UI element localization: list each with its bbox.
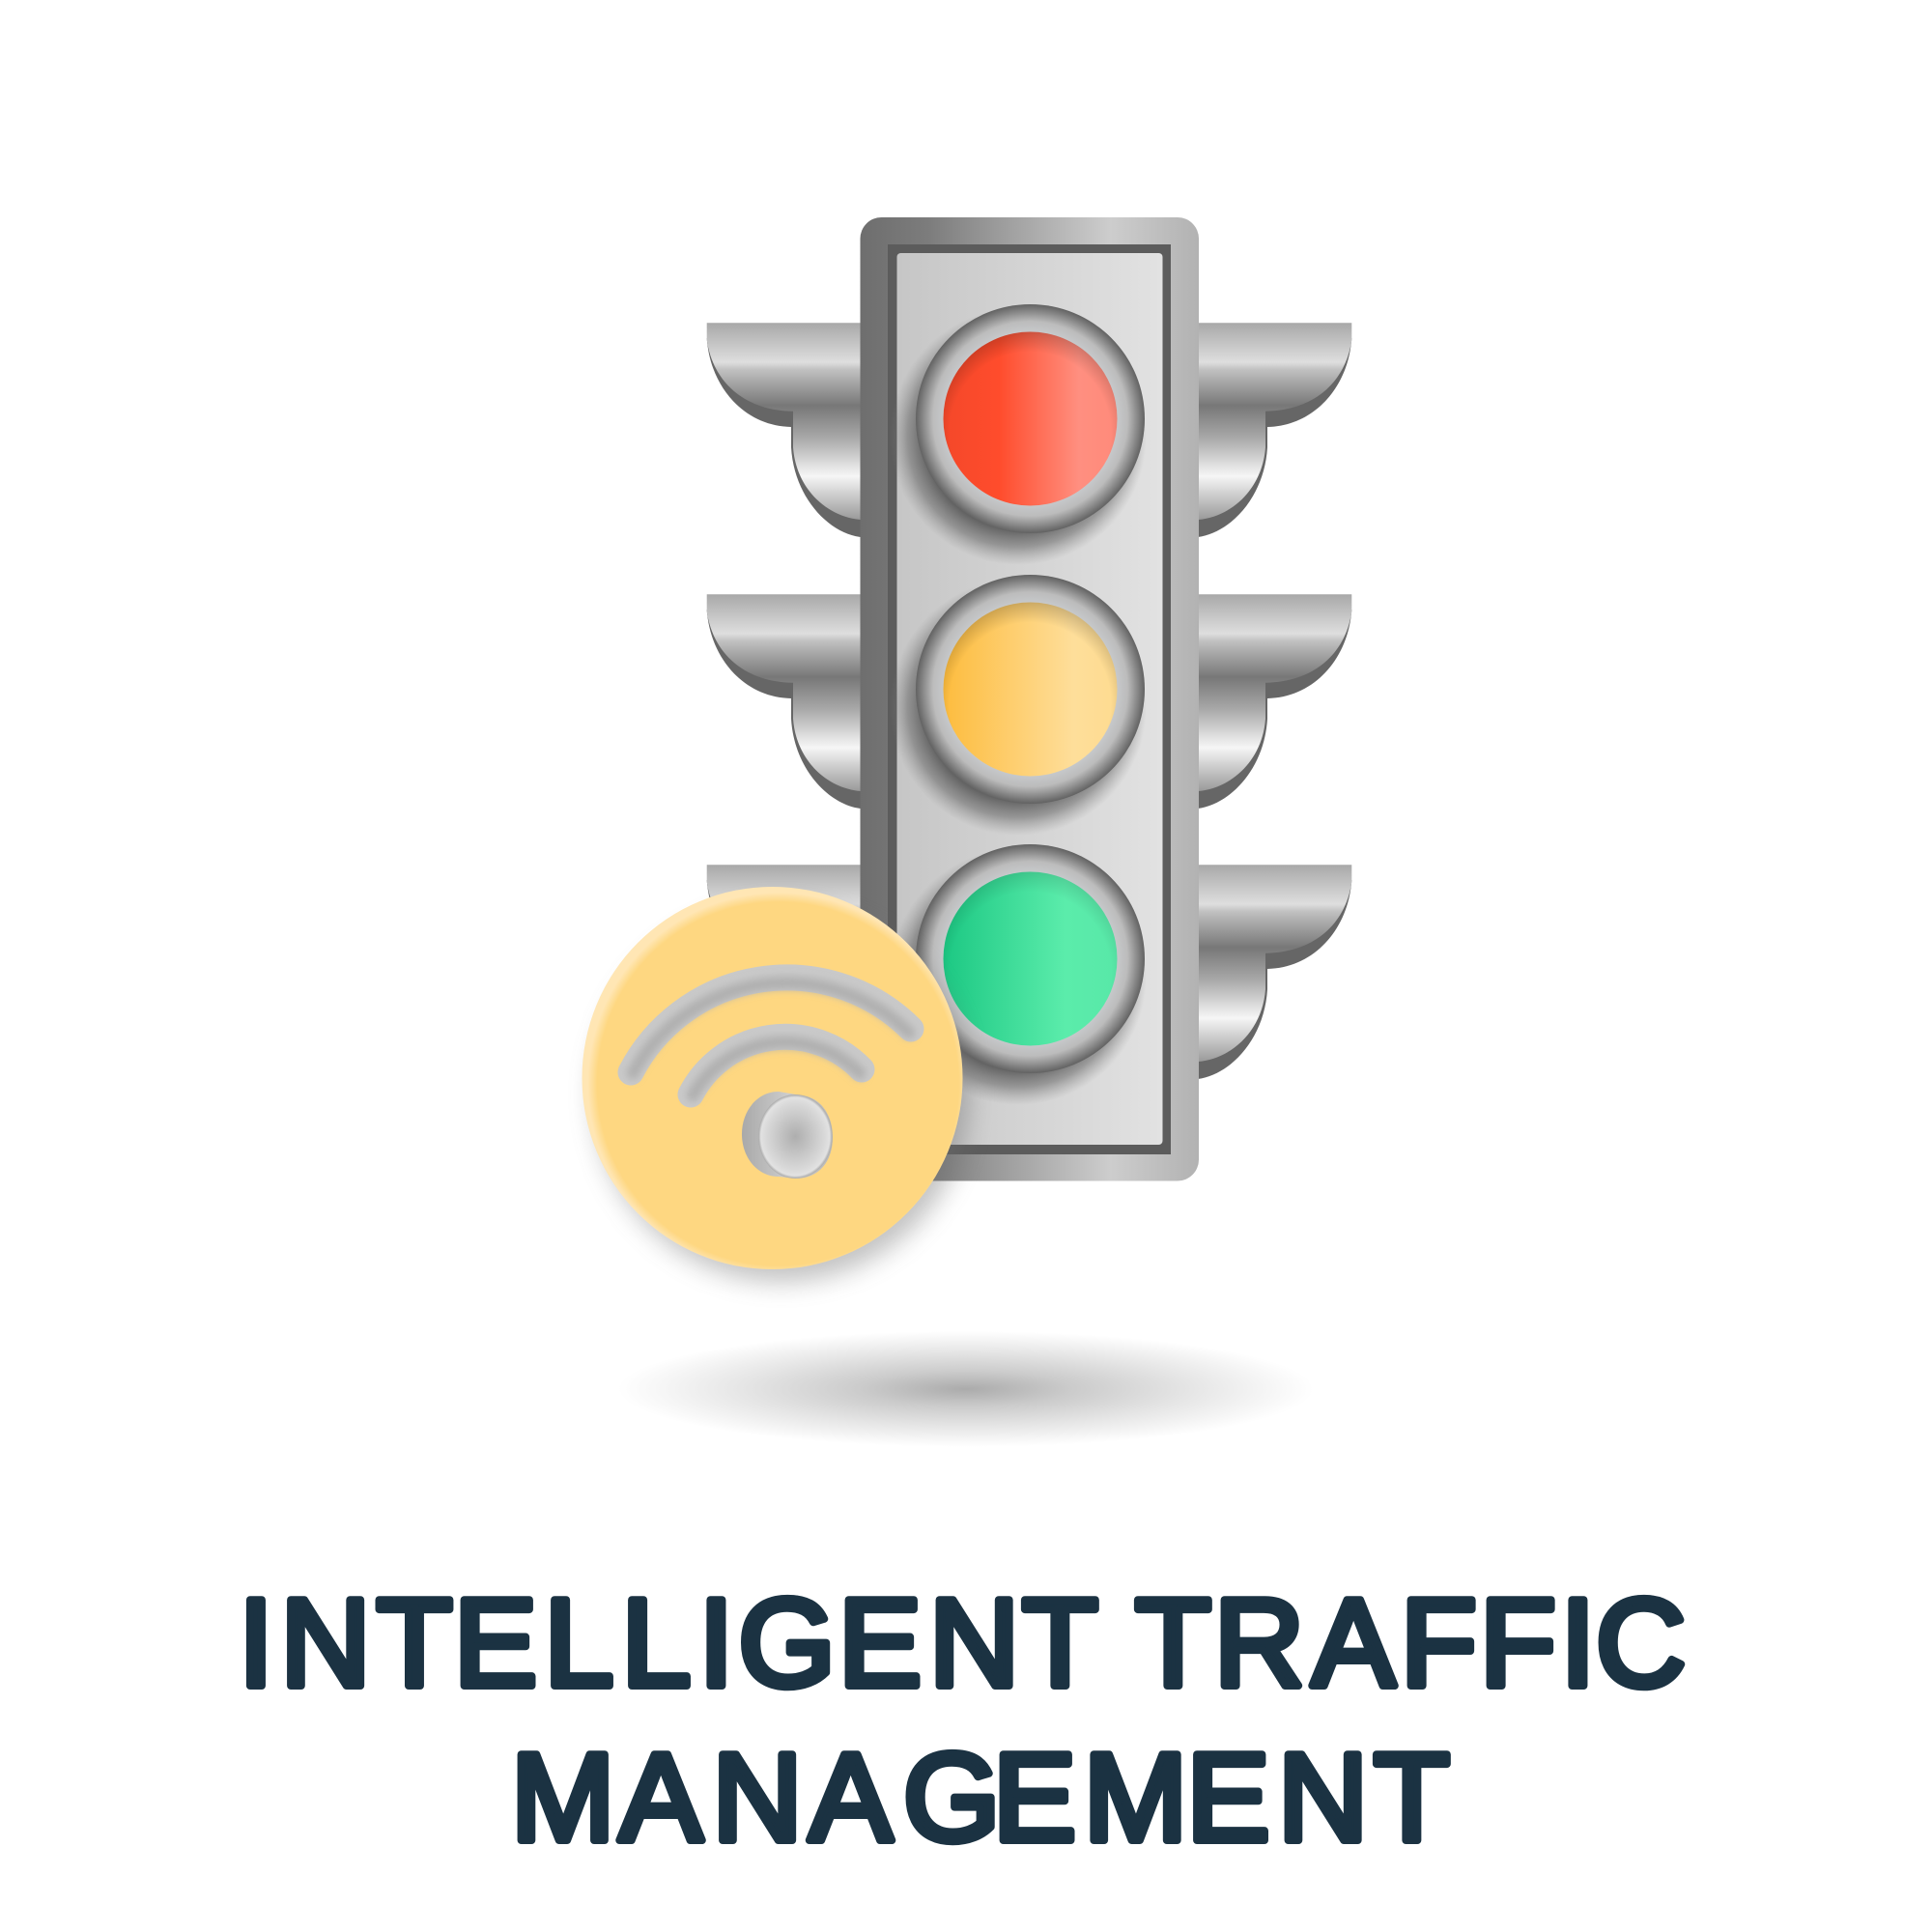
wifi dot xyxy=(742,1092,833,1179)
yellow lamp xyxy=(890,575,1147,836)
wifi outer arc xyxy=(631,978,911,1073)
title xyxy=(239,1574,1686,1867)
red lamp xyxy=(890,304,1147,565)
title line 1: INTELLIGENT TRAFFIC xyxy=(239,1574,1686,1713)
wifi badge xyxy=(582,887,969,1282)
badge disc xyxy=(582,887,962,1269)
green lamp xyxy=(890,844,1147,1105)
ground shadow xyxy=(618,1331,1314,1447)
housing body xyxy=(860,217,1199,1180)
housing inner frame xyxy=(888,244,1171,1154)
wifi inner arc xyxy=(691,1037,862,1095)
traffic light xyxy=(707,217,1351,1180)
face panel xyxy=(896,253,1163,1145)
left mounting wings xyxy=(707,323,861,1079)
title line 2: MANAGEMENT xyxy=(511,1728,1450,1867)
badge shadow xyxy=(594,907,969,1282)
right mounting wings xyxy=(1198,323,1351,1079)
